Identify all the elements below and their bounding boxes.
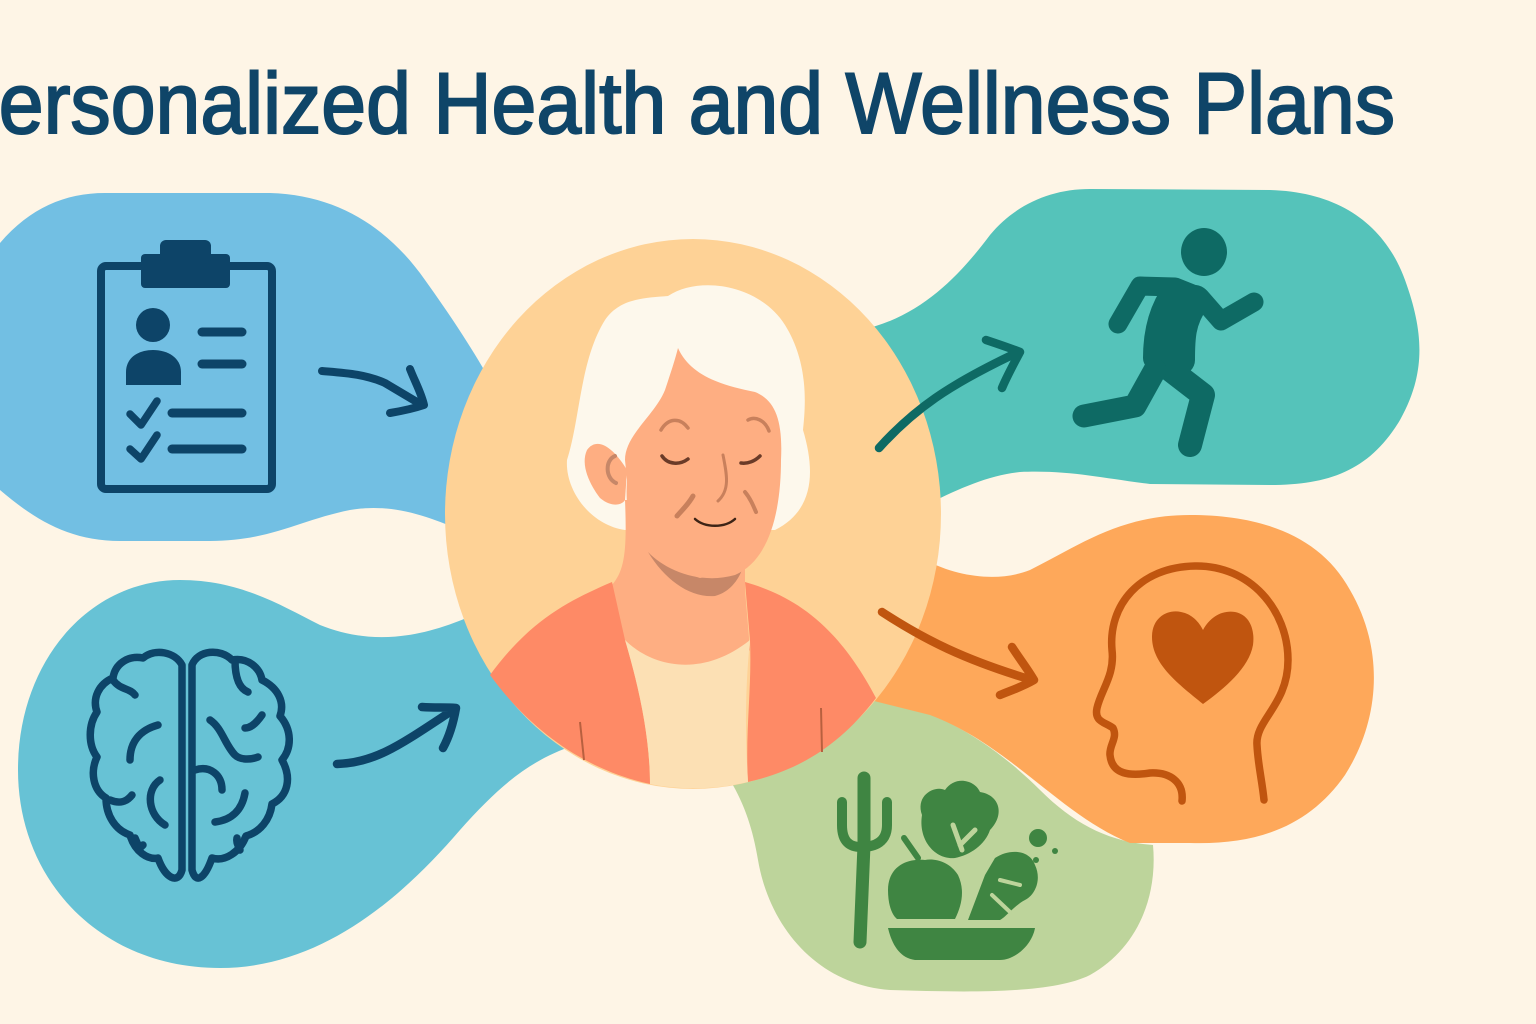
arrow: person to mental wellness <box>882 612 1034 695</box>
inner ear <box>608 456 616 483</box>
arrow: clipboard to person <box>322 369 424 413</box>
icon: runner <box>1084 228 1254 445</box>
neck <box>612 500 750 672</box>
facial features <box>661 418 769 526</box>
panel: brain blob <box>18 580 575 968</box>
hair <box>567 285 810 530</box>
cardigan seams <box>580 708 822 760</box>
panel: mental wellness blob <box>870 515 1374 843</box>
neck shadow <box>648 552 742 596</box>
face <box>625 348 781 578</box>
blouse <box>625 640 750 788</box>
icon: head with heart <box>1096 566 1288 801</box>
cardigan right side <box>745 582 876 782</box>
arrow: person to exercise <box>879 340 1020 448</box>
portrait background circle <box>445 239 941 789</box>
panel: assessment blob <box>0 193 490 541</box>
arrow: brain to person <box>337 707 456 764</box>
icon: brain <box>90 652 289 878</box>
cardigan <box>490 582 650 784</box>
icon: fork and vegetables <box>842 778 1058 960</box>
ear <box>585 444 627 505</box>
panel: exercise blob <box>860 189 1419 503</box>
icon: clipboard <box>101 240 272 489</box>
panel: nutrition blob <box>730 698 1154 991</box>
illustration: central portrait <box>445 239 941 789</box>
